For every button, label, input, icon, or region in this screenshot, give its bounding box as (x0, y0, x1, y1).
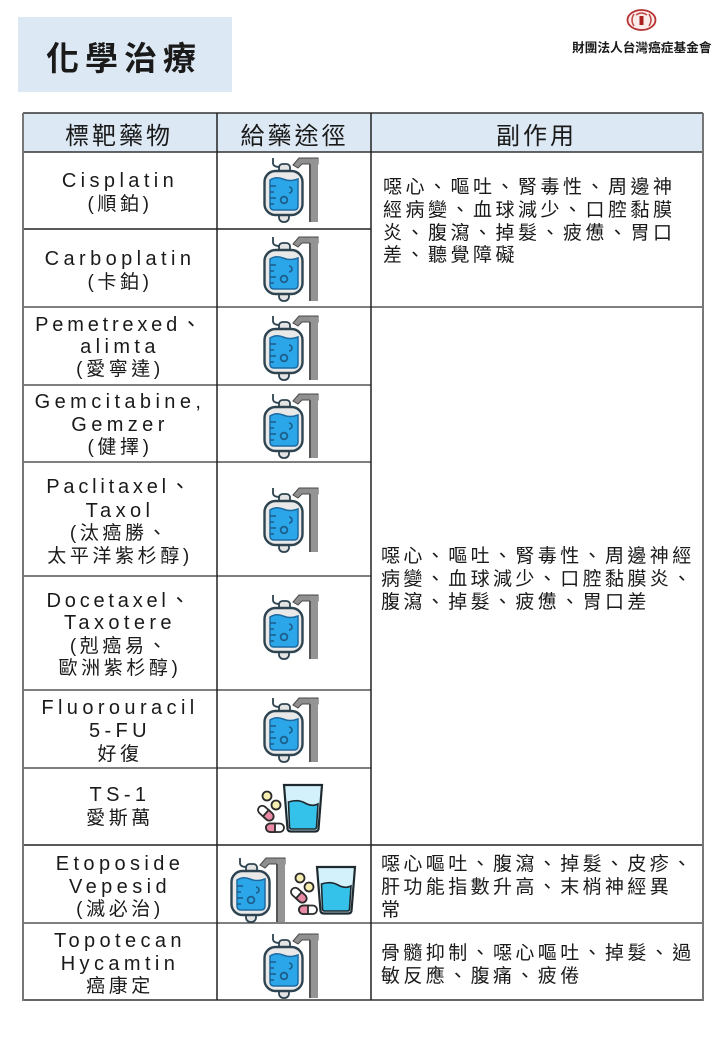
drug: Paclitaxel: 太平洋紫杉醇) (47, 545, 193, 567)
side effects: Etoposide: 噁心嘔吐、腹瀉、掉髮、皮疹、 (381, 853, 695, 875)
icon: IV drip, Pemetrexed (264, 316, 318, 380)
drug: Docetaxel: Taxotere (64, 612, 176, 634)
drug: Gemcitabine (35, 391, 205, 458)
drug: Etoposide (56, 853, 184, 920)
drug: Pemetrexed: Pemetrexed、 (35, 314, 205, 336)
drug: Cisplatin: Cisplatin (62, 170, 178, 192)
drug: Gemcitabine: Gemcitabine, (35, 391, 205, 413)
side effects: shared group: 病變、血球減少、口腔黏膜炎、 (381, 568, 695, 590)
drug: Topotecan: Hycamtin (61, 953, 179, 975)
side effects: Topotecan: 骨髓抑制、噁心嘔吐、掉髮、過 (381, 942, 695, 964)
icon: IV drip, Etoposide (232, 858, 285, 922)
side effects: Topotecan (381, 942, 695, 987)
drug: Topotecan: Topotecan (54, 930, 186, 952)
side effects: shared group (381, 545, 695, 613)
icon: pills and water, Etoposide (289, 867, 355, 914)
drug: Docetaxel (47, 590, 193, 679)
icon: IV drip, Fluorouracil (264, 698, 318, 762)
drug: Etoposide: Etoposide (56, 853, 184, 875)
side effects: platinum drugs: 經病變、血球減少、口腔黏膜 (383, 199, 676, 221)
drug: Pemetrexed: alimta (80, 336, 160, 358)
drug: Topotecan: 癌康定 (86, 975, 154, 997)
table header row: 副作用 (496, 123, 577, 150)
drug: Gemcitabine: (健擇) (87, 436, 153, 458)
drug: Cisplatin: (順鉑) (87, 193, 153, 215)
side effects: platinum drugs: 差、聽覺障礙 (383, 244, 518, 266)
drug: Docetaxel: (剋癌易、 (70, 635, 170, 657)
drug: TS-1: TS-1 (90, 784, 150, 806)
icon: IV drip, Carboplatin (264, 237, 318, 301)
drug: Docetaxel: 歐洲紫杉醇) (59, 657, 181, 679)
title (18, 17, 232, 92)
drug: Fluorouracil: Fluorouracil (41, 697, 199, 719)
drug: Paclitaxel: Paclitaxel、 (46, 476, 194, 498)
side effects: platinum drugs: 炎、腹瀉、掉髮、疲憊、胃口 (383, 222, 676, 244)
icon: IV drip, Docetaxel (264, 595, 318, 659)
title: 化學治療 (46, 40, 202, 77)
side effects: Etoposide: 常 (381, 899, 403, 921)
icon: pills and water, TS-1 (256, 785, 322, 832)
drug: Topotecan (54, 930, 186, 997)
drug: Carboplatin: Carboplatin (45, 248, 195, 270)
drug: Fluorouracil (41, 697, 199, 765)
drug: Paclitaxel (46, 476, 194, 567)
drug: Fluorouracil: 5-FU (89, 720, 151, 742)
drug: Etoposide: Vepesid (69, 876, 171, 898)
icon: IV drip, Gemcitabine (264, 394, 318, 458)
side effects: platinum drugs: 噁心、嘔吐、腎毒性、周邊神 (383, 176, 676, 198)
icon: IV drip, Paclitaxel (264, 488, 318, 552)
drug: Cisplatin (62, 170, 178, 215)
drug: Carboplatin (45, 248, 195, 293)
table header row (23, 113, 703, 152)
logo: foundation emblem and name: 財團法人台灣癌症基金會 (572, 40, 712, 55)
side effects: Topotecan: 敏反應、腹痛、疲倦 (381, 964, 583, 987)
drug: Paclitaxel: Taxol (86, 500, 154, 522)
drug: Pemetrexed: (愛寧達) (76, 358, 164, 380)
drug: TS-1: 愛斯萬 (86, 807, 154, 829)
icon: IV drip, Cisplatin (264, 158, 318, 222)
drug: Docetaxel: Docetaxel、 (47, 590, 193, 612)
table header row: 標靶藥物 (65, 123, 173, 150)
drug: Carboplatin: (卡鉑) (87, 271, 153, 293)
side effects: Etoposide: 肝功能指數升高、末梢神經異 (381, 876, 672, 898)
side effects: shared group: 腹瀉、掉髮、疲憊、胃口差 (381, 591, 650, 613)
side effects: shared group: 噁心、嘔吐、腎毒性、周邊神經 (381, 545, 695, 567)
logo: foundation emblem and name (572, 10, 712, 55)
icon: IV drip, Topotecan (264, 934, 318, 998)
drug: Pemetrexed (35, 314, 205, 380)
table header row: 給藥途徑 (240, 123, 348, 150)
drug: Gemcitabine: Gemzer (71, 414, 169, 436)
drug: Fluorouracil: 好復 (97, 743, 143, 765)
drug: Etoposide: (滅必治) (76, 898, 164, 920)
drug: Paclitaxel: (汰癌勝、 (70, 522, 170, 544)
side effects: platinum drugs (383, 176, 676, 266)
drug: TS-1 (86, 784, 154, 829)
side effects: Etoposide (381, 853, 695, 921)
